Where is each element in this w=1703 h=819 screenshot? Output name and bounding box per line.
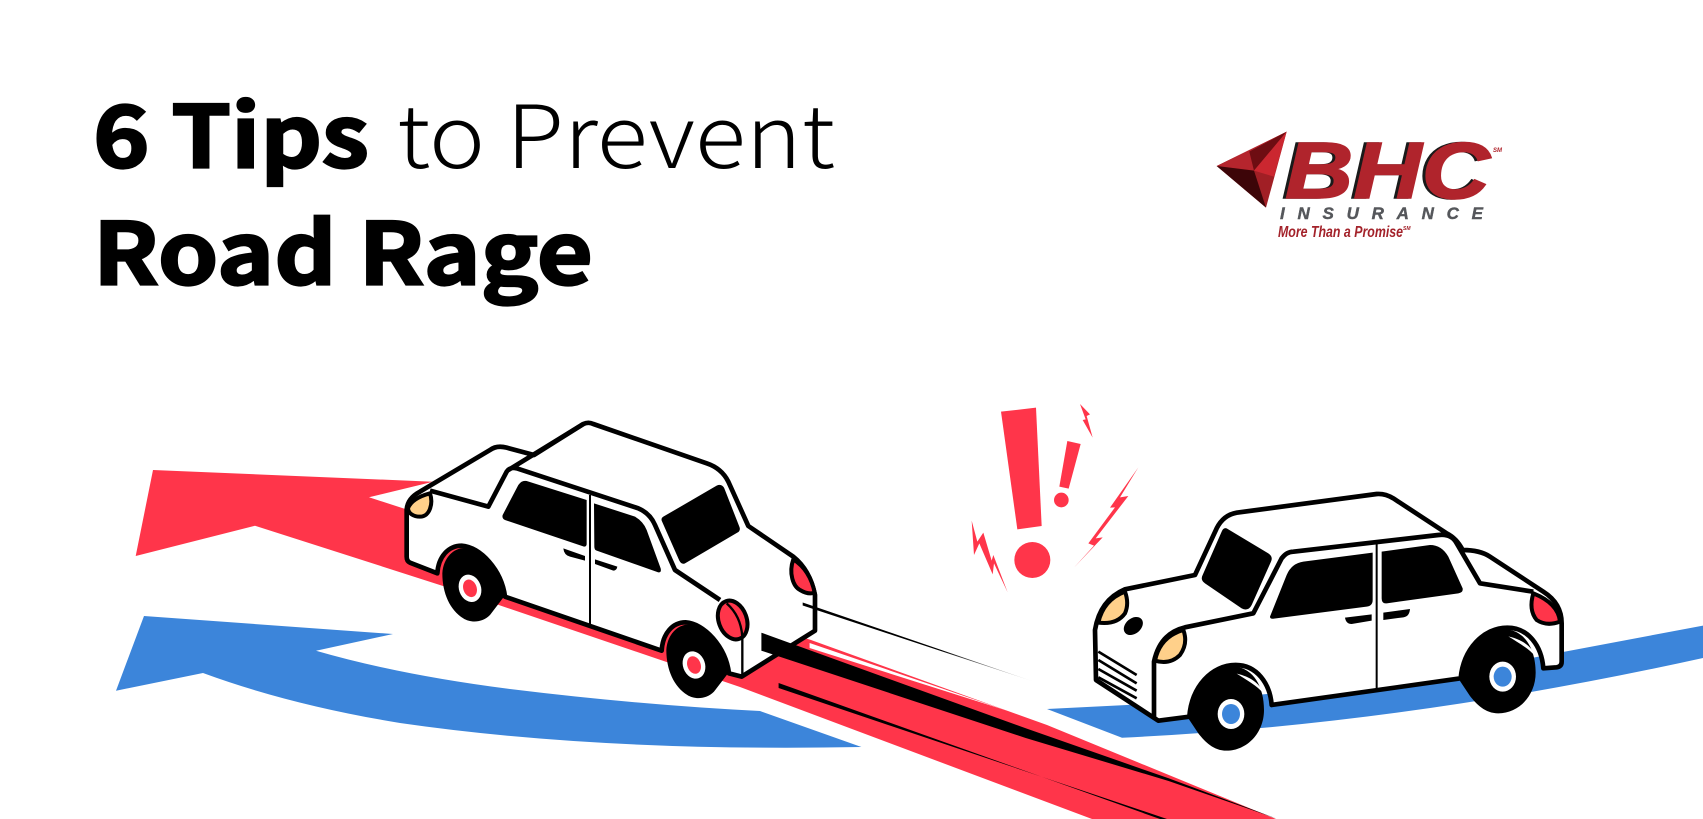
left car body lines (430, 424, 720, 600)
right car (1095, 494, 1562, 751)
logo: BHC Insurance (1217, 126, 1503, 241)
right car headlight far (1098, 592, 1127, 623)
left car door handles (563, 548, 617, 571)
title line 1 bold: 6 Tips (93, 68, 369, 192)
logo tagline: More Than a Promise (1278, 224, 1403, 241)
right car grille (1098, 652, 1137, 698)
bolt right (1074, 467, 1138, 568)
blue arrow left (116, 616, 861, 748)
logo insurance: INSURANCE (1280, 204, 1484, 223)
bolt left (972, 521, 1008, 592)
left car front wheel (666, 625, 728, 698)
left car rear wheel (442, 548, 504, 621)
black bumper streak (761, 633, 1276, 818)
left car windshield (662, 485, 740, 564)
right car door handles (1345, 609, 1410, 624)
left car arch fill front (665, 627, 686, 647)
left car arch fill rear (441, 550, 462, 570)
right car fog lamp (1120, 613, 1146, 639)
title line 2 bold: Road Rage (93, 184, 593, 310)
right car tail light (1531, 593, 1560, 624)
right car headlight near (1155, 630, 1185, 662)
right car windshield (1202, 528, 1272, 609)
left car (407, 423, 815, 698)
left car rear window (502, 481, 587, 547)
title line 1 light: to Prevent (397, 68, 835, 194)
right car front window (1270, 553, 1373, 619)
logo wordmark: BHC (1285, 126, 1491, 215)
blue arrow right (1047, 626, 1703, 738)
white motion sliver (810, 643, 1008, 711)
road stripe (779, 683, 1167, 819)
left car front window (594, 503, 661, 572)
logo service mark: SM (1493, 148, 1503, 154)
right car rear wheel (1460, 629, 1536, 713)
left car headlight near (713, 596, 753, 677)
right car door line (1374, 544, 1380, 688)
right car rear window (1382, 545, 1463, 603)
right car body lines (1154, 535, 1533, 718)
small exclamation mark (1054, 441, 1081, 507)
red road arrow (136, 470, 1276, 819)
exclamation marks and bolts (972, 404, 1138, 592)
logo wordmark shadow: BHC (1282, 126, 1488, 215)
left car tail light (408, 493, 431, 517)
left car door line (587, 495, 593, 625)
bolt top right (1080, 404, 1093, 438)
motion line from left car (803, 602, 1035, 682)
big exclamation mark (1001, 408, 1050, 578)
logo tagline mark: SM (1403, 226, 1411, 232)
right car body (1095, 494, 1562, 721)
right car front wheel (1188, 667, 1264, 751)
left car headlight far (791, 559, 815, 593)
logo mark: faceted arrow (1217, 132, 1287, 208)
left car body (407, 423, 815, 677)
title (93, 68, 835, 310)
